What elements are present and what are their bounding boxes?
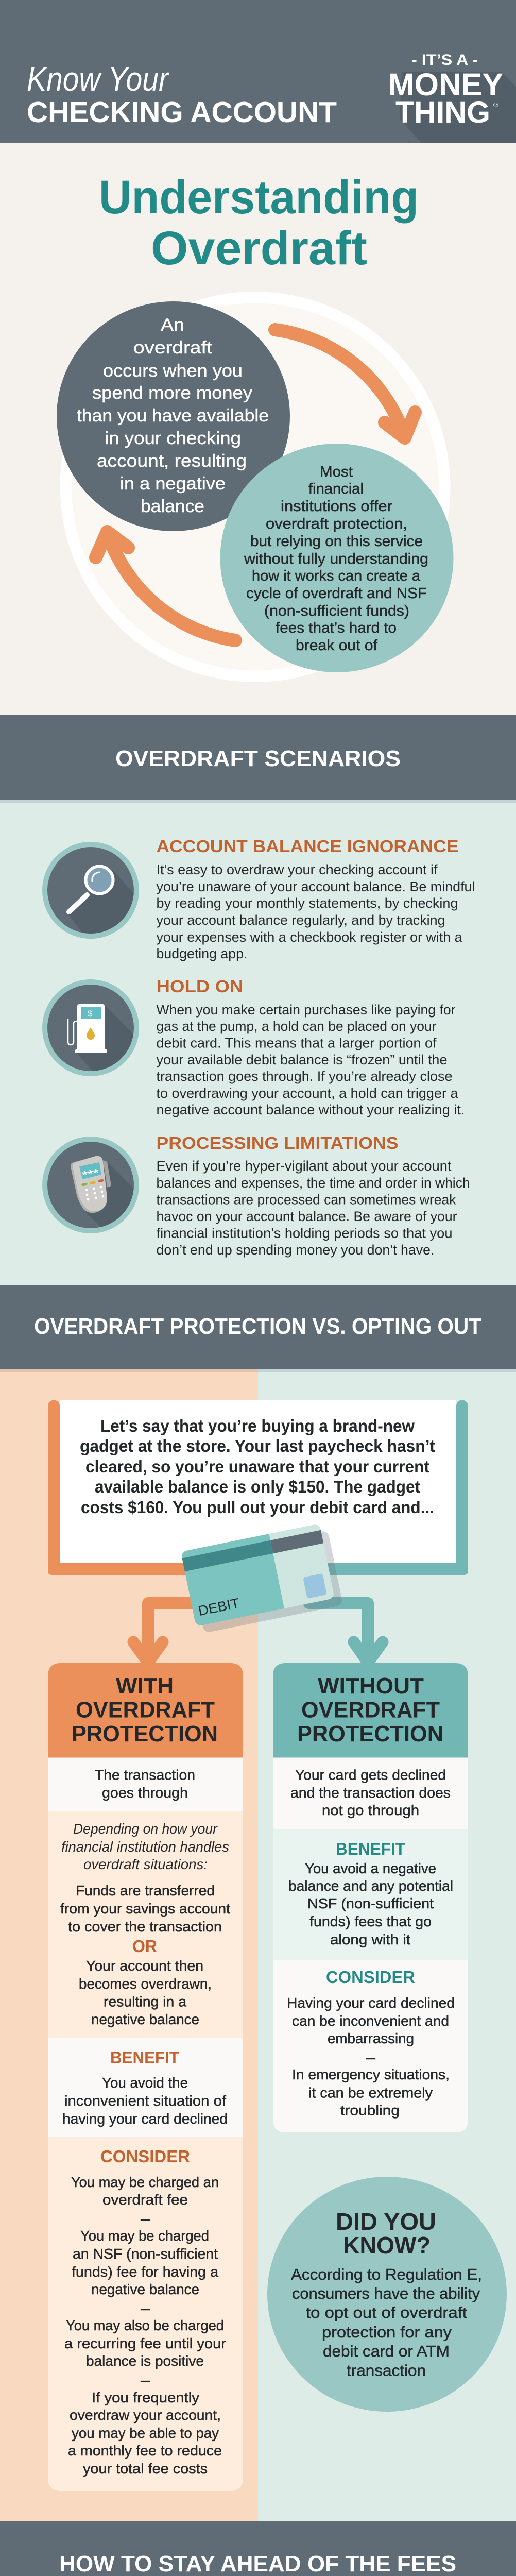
heading: without overdraft protection: PROTECTION: [297, 1721, 443, 1747]
text: account balance ignorance: budgeting app.: [157, 946, 247, 961]
heading: with overdraft protection: PROTECTION: [72, 1721, 218, 1747]
consider: with protection: —: [141, 2300, 150, 2316]
consider: without protection: CONSIDER: [326, 1968, 415, 1987]
text: hold on: negative account balance without your realizing it.: [157, 1102, 465, 1117]
circle: overdraft protection note: break out of: [296, 637, 378, 654]
benefit: without protection: NSF (non-sufficient: [307, 1895, 434, 1911]
logo: it's a money thing: MONEY: [388, 67, 503, 102]
consider: without protection: —: [366, 2049, 375, 2065]
heading: processing limitations: PROCESSING LIMITATIONS: [157, 1133, 399, 1153]
heading: account balance ignorance: ACCOUNT BALANCE IGNORANCE: [157, 837, 458, 856]
outcome: transaction goes through: goes through: [102, 1785, 188, 1801]
circle: overdraft definition: spend more money: [92, 383, 252, 403]
details: funds handling: resulting in a: [104, 1994, 186, 2009]
icon: debit card: [181, 1523, 343, 1633]
consider: with protection: overdraft fee: [102, 2192, 188, 2208]
band: how to stay ahead of the fees: [0, 2521, 516, 2576]
benefit: without protection: You avoid a negative: [305, 1860, 436, 1876]
arrow: bottom cycle arrow: [96, 532, 235, 640]
logo: it's a money thing: [388, 52, 503, 129]
details: funds handling: financial institution handles: [61, 1839, 229, 1855]
consider: without protection: can be inconvenient and: [292, 2013, 449, 2029]
outcome: card declined: [273, 1758, 468, 1829]
circle: overdraft protection note: how it works can create a: [252, 568, 421, 584]
circle: overdraft definition: overdraft: [133, 338, 213, 358]
text: account balance ignorance: It’s easy to overdraw your checking account if: [157, 862, 438, 877]
icon: debit card: DEBIT: [197, 1596, 241, 1619]
cycle ring: [60, 292, 450, 682]
circle: overdraft protection note: [220, 444, 453, 672]
icon: gas pump: $: [88, 1009, 93, 1019]
callout: did you know: debit card or ATM: [323, 2342, 450, 2360]
text: processing limitations: havoc on your account balance. Be aware of your: [157, 1209, 457, 1224]
benefit: without protection: BENEFIT: [336, 1839, 405, 1858]
circle: overdraft protection note: cycle of overdraft and NSF: [246, 585, 427, 602]
details: funds handling: to cover the transaction: [68, 1919, 222, 1935]
circle: overdraft protection note: (non-sufficient funds): [264, 603, 409, 619]
text: hold on: transaction goes through. If you’re already close: [157, 1069, 452, 1084]
band: overdraft scenarios: [0, 715, 516, 800]
heading: understanding overdraft: [99, 171, 419, 275]
circle: overdraft definition: in your checking: [105, 429, 241, 448]
details: funds handling: Your account then: [86, 1958, 203, 1974]
text: hold on: debit card. This means that a larger portion of: [157, 1036, 437, 1051]
icon: card reader: [42, 1137, 139, 1236]
title: know your checking account: CHECKING ACCOUNT: [27, 96, 337, 129]
text: account balance ignorance: you’re unaware of your account balance. Be mindful: [157, 879, 475, 894]
consider: with protection: You may be charged an: [71, 2174, 219, 2190]
text: processing limitations: don’t end up spending money you don’t have.: [157, 1242, 435, 1258]
outcome: transaction goes through: The transaction: [95, 1767, 195, 1783]
arrow: to with overdraft protection: [133, 1603, 196, 1663]
circle: overdraft protection note: but relying on this service: [250, 533, 423, 550]
consider: with protection: a monthly fee to reduce: [68, 2443, 222, 2459]
details: funds handling: from your savings account: [60, 1901, 230, 1917]
logo: it's a money thing: THING: [395, 96, 490, 129]
consider: with protection: You may also be charged: [66, 2317, 224, 2333]
benefit: with protection: You avoid the: [102, 2075, 188, 2091]
text: account balance ignorance: by reading your monthly statements, by checking: [157, 895, 458, 911]
circle: overdraft protection note: institutions offer: [281, 498, 392, 515]
header band: [0, 0, 516, 143]
icon: card reader: ***: [81, 1167, 100, 1181]
consider: with protection: —: [141, 2211, 150, 2227]
consider: with protection: —: [141, 2372, 150, 2388]
consider: with protection: overdraw your account,: [70, 2407, 221, 2423]
callout: did you know: DID YOU: [336, 2208, 436, 2235]
text: gadget scenario: cleared, so you’re unaware that your current: [85, 1457, 429, 1476]
heading: without overdraft protection: WITHOUT: [318, 1673, 424, 1699]
text: gadget scenario: available balance is only $150. The gadget: [95, 1477, 420, 1496]
consider: with protection: CONSIDER: [100, 2147, 190, 2166]
text: processing limitations: financial institution’s holding periods so that you: [157, 1226, 452, 1241]
outcome: card declined: not go through: [322, 1802, 419, 1818]
text: account balance ignorance: your expenses with a checkbook register or with a: [157, 929, 462, 945]
details: funds handling: becomes overdrawn,: [79, 1976, 212, 1992]
title: know your checking account: Know Your: [27, 60, 170, 98]
panel: without overdraft protection: [273, 1663, 468, 2132]
callout: did you know: to opt out of overdraft: [306, 2303, 467, 2321]
heading: hold on: HOLD ON: [157, 977, 243, 996]
text: account balance ignorance: [157, 862, 475, 961]
text: gadget scenario: gadget at the store. Your last paycheck hasn’t: [80, 1436, 435, 1455]
circle: overdraft definition: [57, 301, 290, 531]
consider: with protection: balance is positive: [86, 2353, 204, 2369]
benefit: without protection: along with it: [330, 1931, 410, 1947]
benefit: with protection: BENEFIT: [110, 2048, 179, 2067]
logo shadow: [400, 72, 516, 143]
consider: without protection: it can be extremely: [308, 2084, 433, 2101]
benefit: without protection: balance and any potential: [288, 1878, 453, 1894]
circle: overdraft definition: occurs when you: [103, 361, 243, 381]
outcome: card declined: and the transaction does: [290, 1785, 451, 1801]
heading: without overdraft protection: [273, 1663, 468, 1758]
benefit: with protection: [48, 2038, 243, 2137]
consider: with protection: funds) fee for having a: [72, 2264, 218, 2280]
consider: with protection: If you frequently: [92, 2389, 199, 2405]
heading: with overdraft protection: [48, 1663, 243, 1758]
text: hold on: gas at the pump, a hold can be placed on your: [157, 1019, 437, 1034]
circle: overdraft definition: An: [161, 315, 184, 335]
outcome: transaction goes through: [48, 1758, 243, 1811]
callout: did you know: According to Regulation E,: [291, 2265, 482, 2283]
panel: understanding overdraft: [0, 143, 516, 715]
band: overdraft scenarios: OVERDRAFT SCENARIOS: [115, 746, 401, 771]
heading: understanding overdraft: Understanding: [99, 171, 419, 224]
circle: overdraft protection note: Most: [320, 464, 353, 480]
details: funds handling: [48, 1811, 243, 2038]
consider: with protection: an NSF (non-sufficient: [73, 2246, 218, 2262]
text: gadget scenario: Let’s say that you’re buying a brand-new: [100, 1416, 415, 1435]
circle: overdraft protection note: fees that’s hard to: [276, 620, 397, 636]
consider: with protection: You may be charged: [80, 2228, 209, 2244]
text: hold on: to overdrawing your account, a hold can trigger a: [157, 1086, 458, 1101]
heading: with overdraft protection: OVERDRAFT: [76, 1697, 215, 1723]
icon: magnifying glass: [42, 842, 139, 943]
heading: understanding overdraft: Overdraft: [151, 222, 367, 275]
band: protection vs opting out: OVERDRAFT PROTECTION VS. OPTING OUT: [34, 1314, 481, 1339]
circle: overdraft definition: in a negative: [120, 474, 226, 494]
callout: did you know: [267, 2177, 507, 2412]
details: funds handling: Depending on how your: [73, 1821, 218, 1837]
details: funds handling: overdraft situations:: [83, 1856, 208, 1872]
benefit: without protection: funds) fees that go: [309, 1913, 432, 1929]
details: funds handling: OR: [132, 1937, 157, 1956]
circle: overdraft protection note: financial: [308, 481, 364, 497]
details: funds handling: Funds are transferred: [76, 1883, 215, 1899]
outcome: card declined: Your card gets declined: [295, 1767, 446, 1783]
benefit: with protection: inconvenient situation of: [64, 2093, 226, 2109]
callout: did you know: transaction: [347, 2362, 426, 2379]
consider: without protection: troubling: [340, 2102, 400, 2119]
arrow: top cycle arrow: [275, 330, 415, 438]
arrow: to without overdraft protection: [309, 1603, 383, 1663]
consider: with protection: your total fee costs: [83, 2461, 208, 2477]
circle: overdraft definition: than you have available: [77, 406, 269, 426]
details: funds handling: negative balance: [91, 2011, 199, 2027]
benefit: without protection: [273, 1829, 468, 1960]
text: gadget scenario: costs $160. You pull out your debit card and...: [81, 1498, 434, 1517]
callout: did you know: protection for any: [322, 2323, 452, 2341]
circle: overdraft definition: balance: [141, 497, 204, 516]
logo: it's a money thing: ®: [493, 101, 498, 109]
circle: overdraft protection note: without fully understanding: [244, 551, 428, 567]
text: hold on: [157, 1002, 465, 1117]
text: processing limitations: Even if you’re hyper-vigilant about your account: [157, 1158, 452, 1174]
consider: without protection: [273, 1960, 468, 2132]
panel: scenario intro box: [48, 1400, 468, 1575]
consider: with protection: you may be able to pay: [72, 2425, 219, 2441]
icon: gas pump: [42, 979, 139, 1082]
circle: overdraft definition: account, resulting: [97, 451, 247, 471]
band: how to stay ahead of the fees: HOW TO STAY AHEAD OF THE FEES: [59, 2551, 456, 2576]
callout: did you know: consumers have the ability: [292, 2284, 480, 2302]
panel: with overdraft protection: [48, 1663, 243, 2491]
text: gadget scenario: [80, 1416, 435, 1517]
heading: with overdraft protection: WITH: [116, 1673, 174, 1699]
consider: without protection: Having your card declined: [287, 1995, 455, 2011]
callout: did you know: KNOW?: [343, 2232, 431, 2259]
panel: scenarios: [0, 800, 516, 1285]
consider: with protection: [48, 2137, 243, 2491]
text: hold on: When you make certain purchases like paying for: [157, 1002, 456, 1018]
text: account balance ignorance: your account balance regularly, and by tracking: [157, 912, 445, 928]
consider: with protection: a recurring fee until your: [64, 2335, 226, 2351]
logo: it's a money thing: - IT’S A -: [411, 52, 478, 69]
benefit: with protection: having your card declined: [62, 2111, 228, 2127]
text: hold on: your available debit balance is “frozen” until the: [157, 1052, 447, 1067]
circle: overdraft protection note: overdraft protection,: [266, 516, 407, 532]
consider: with protection: negative balance: [91, 2281, 199, 2297]
consider: without protection: In emergency situations,: [292, 2066, 450, 2082]
text: processing limitations: [157, 1158, 470, 1258]
text: processing limitations: transactions are processed can sometimes wreak: [157, 1192, 456, 1208]
title: know your checking account: [27, 60, 337, 129]
consider: without protection: embarrassing: [328, 2030, 414, 2046]
band: protection vs opting out: [0, 1285, 516, 1369]
panel: comparison background: [0, 1369, 516, 2521]
text: processing limitations: balances and expenses, the time and order in which: [157, 1175, 470, 1191]
heading: without overdraft protection: OVERDRAFT: [301, 1697, 440, 1723]
